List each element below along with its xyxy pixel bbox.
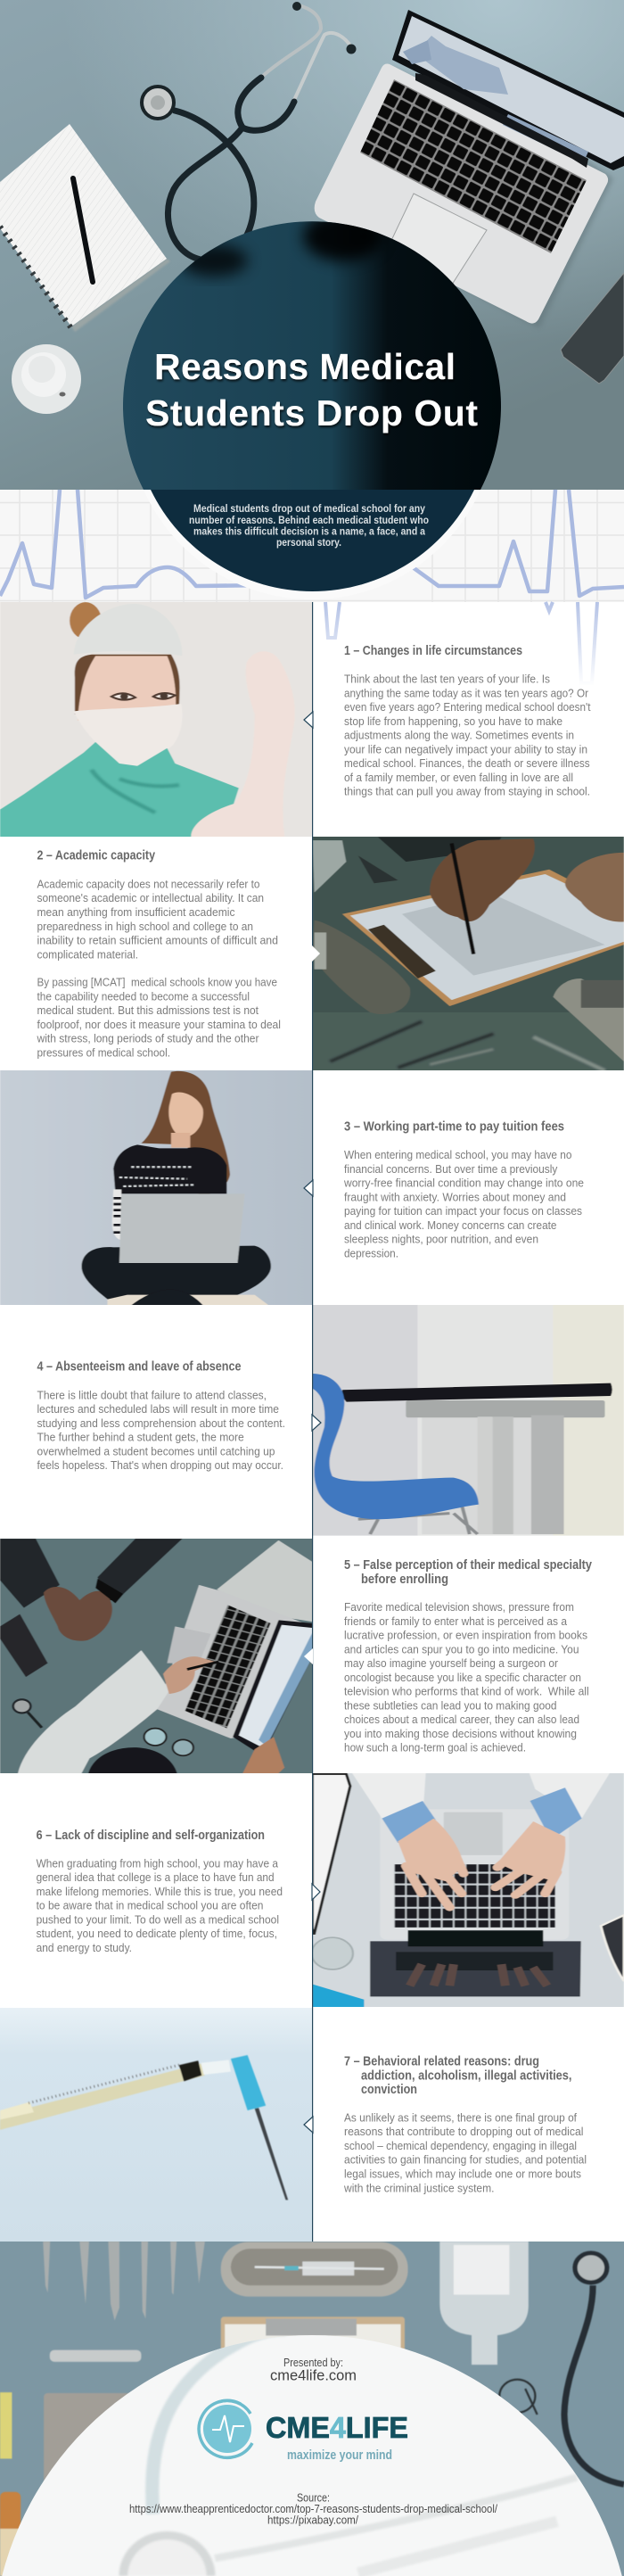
panel 7 text: reasons that contribute to dropping out of medical bbox=[344, 2125, 584, 2138]
title text: Students Drop Out bbox=[145, 392, 478, 433]
panel 6 text: student, you need to dedicate plenty of time, focus, bbox=[37, 1927, 277, 1940]
panel 5 text: choices about a medical career, they can also lead bbox=[344, 1713, 579, 1726]
panel 1 text: adjustments along the way. Sometimes events in bbox=[344, 729, 574, 742]
panel 6 text bbox=[37, 1829, 283, 1954]
footer white circle panel bbox=[2, 2330, 622, 2576]
hero photo: desk with stethoscope, laptop, notebook bbox=[0, 0, 624, 490]
icon: IV bag bbox=[439, 2242, 529, 2365]
panel 2 text: the capability needed to become a successful bbox=[37, 989, 250, 1003]
icon: stethoscope bbox=[142, 2, 357, 260]
presented by text: cme4life.com bbox=[270, 2367, 357, 2383]
panel 4 text: 4 – Absenteeism and leave of absence bbox=[37, 1360, 241, 1375]
panel 3 photo: woman with laptop bbox=[0, 1070, 315, 1305]
panel 2 text: inability to retain sufficient amounts of difficult and bbox=[37, 934, 278, 947]
panel 4 text bbox=[37, 1360, 285, 1472]
panel 6 text: and energy to study. bbox=[37, 1941, 132, 1954]
stethoscope and laptop shadows inside the circle bbox=[180, 211, 383, 277]
icon: pill bottle bbox=[0, 2392, 12, 2458]
panel 4 text: overwhelmed a student becomes until catching up bbox=[37, 1444, 275, 1457]
intro text: number of reasons. Behind each medical student who bbox=[189, 514, 429, 526]
panel 6 text: make lifelong memories. While this is true, you need bbox=[37, 1885, 283, 1898]
panel 1 text: medical school. Finances, the death or severe illness bbox=[344, 756, 590, 770]
panel 1 text: 1 – Changes in life circumstances bbox=[344, 644, 522, 658]
presented by text: Presented by: bbox=[283, 2357, 343, 2369]
panel 2 text: with stress, long periods of study and the other bbox=[37, 1032, 259, 1045]
icon: metal case bbox=[44, 2393, 139, 2504]
icon: notebook with pen bbox=[0, 124, 170, 332]
icon: laptop bbox=[315, 10, 624, 328]
sources text: https://pixabay.com/ bbox=[267, 2514, 358, 2527]
panel 1 text: stop life from happening, so you have to make bbox=[344, 714, 562, 728]
panel 1 text: things that can pull you away from staying in school. bbox=[344, 785, 590, 798]
panel 7 text: activities to gain financing for studies, and potential bbox=[344, 2153, 587, 2167]
panel 5 text: you into making those decisions without knowing bbox=[344, 1727, 577, 1740]
panel 3 text: sleepless nights, poor nutrition, and even bbox=[344, 1233, 538, 1246]
title text: Reasons Medical bbox=[154, 346, 456, 387]
panel 3 text: fraught with anxiety. Worries about money and bbox=[344, 1190, 566, 1203]
presented by text bbox=[270, 2357, 357, 2383]
panel 7 text: conviction bbox=[361, 2083, 417, 2097]
panel 1 text: anything the same today as it was ten years ago? Or bbox=[344, 686, 589, 699]
panel 1 photo: surgeon in mask bbox=[0, 598, 315, 840]
logo tagline: maximize your mind bbox=[287, 2448, 392, 2463]
panel 3 text: depression. bbox=[344, 1246, 398, 1259]
panel 7 text: As unlikely as it seems, there is one final group of bbox=[344, 2110, 577, 2124]
panel 5 text: oncologist because you like a specific character on bbox=[344, 1671, 581, 1684]
panel 2 text: medical student. But this admissions test is not bbox=[37, 1003, 259, 1017]
chart: heartbeat trace bbox=[0, 490, 624, 598]
panel 2 text: 2 – Academic capacity bbox=[37, 849, 155, 863]
panel 6 text: to be aware that in medical school you are often bbox=[37, 1899, 263, 1912]
panel 5 text bbox=[344, 1558, 592, 1754]
panel 4 text: feels hopeless. That's when dropping out may occur. bbox=[37, 1458, 283, 1472]
panel 5 text: lucrative profession, or even inspiration from books bbox=[344, 1629, 587, 1641]
panel 2 photo: hand writing on clipboard bbox=[312, 837, 624, 1074]
panel 7 text bbox=[343, 2055, 587, 2194]
panel 4 text: There is little doubt that failure to attend classes, bbox=[37, 1388, 267, 1401]
panel 6 text: When graduating from high school, you may have a bbox=[37, 1856, 279, 1870]
panel 5 text: Favorite medical television shows, pressure from bbox=[344, 1600, 574, 1614]
panel 7 text: 7 – Behavioral related reasons: drug bbox=[344, 2055, 539, 2069]
panel 5 photo: doctors at laptop from above bbox=[0, 1537, 315, 1774]
icon: clipboard bbox=[221, 2316, 405, 2361]
panel 5 text: and articles can spur you to go into medicine. You bbox=[344, 1642, 579, 1655]
panel 3 text: paying for tuition can impact your focus on classes bbox=[344, 1204, 582, 1218]
intro text: Medical students drop out of medical school for any bbox=[193, 502, 425, 515]
panel 6 text: 6 – Lack of discipline and self-organization bbox=[37, 1829, 265, 1843]
panel 4 text: The further behind a student gets, the more bbox=[37, 1431, 244, 1444]
panel 2 text: By passing [MCAT] medical schools know you have bbox=[37, 976, 277, 989]
intro text: personal story. bbox=[276, 536, 341, 549]
panel 3 text: worry-free financial condition may change into one bbox=[343, 1177, 584, 1190]
panel 6 photo: hands typing on laptop bbox=[312, 1773, 624, 2010]
icon: glasses bbox=[499, 2380, 538, 2415]
panel 1: text side faded heartbeat bbox=[325, 602, 597, 683]
panel 2 text: preparedness in high school and college to an bbox=[37, 920, 253, 933]
panel 7 text: legal issues, which may include one or more bouts bbox=[344, 2167, 581, 2181]
sources text: https://www.theapprenticedoctor.com/top-7-reasons-students-drop-medical-school/ bbox=[129, 2503, 497, 2515]
panel 1 text: of a family member, or even falling in love are all bbox=[344, 771, 573, 784]
panel 1 text: your life can negatively impact your ability to stay in bbox=[344, 742, 587, 755]
panel 2 text: mean anything from insufficient academic bbox=[37, 905, 235, 919]
icon: orange bottle bbox=[0, 2492, 21, 2536]
footer photo: medical instruments on blue table bbox=[0, 2242, 624, 2576]
panel 4 text: lectures and scheduled labs will result in more time bbox=[37, 1402, 279, 1416]
panel 1 text: even five years ago? Entering medical school doesn't bbox=[344, 700, 591, 714]
panel 6 text: pushed to your limit. To do well as a medical school bbox=[37, 1912, 279, 1926]
logo bbox=[199, 2400, 408, 2463]
panel 2 text: pressures of medical school. bbox=[37, 1045, 170, 1060]
icon: surgical instruments bbox=[43, 2242, 205, 2321]
logo wordmark: CME4LIFE bbox=[266, 2411, 408, 2444]
panel 5 text: may also imagine yourself being a surgeon or bbox=[344, 1656, 559, 1670]
panel 7 text: school – chemical dependency, engaging in illegal bbox=[344, 2139, 577, 2152]
intro text: makes this difficult decision is a name, a face, and a bbox=[193, 524, 425, 537]
panel 3 text: financial concerns. But over time a previously bbox=[344, 1162, 558, 1176]
panel 5 text: before enrolling bbox=[361, 1573, 448, 1587]
panel 7 text: with the criminal justice system. bbox=[343, 2181, 494, 2194]
panel 5 text: friends or family to enter what is perceived as a bbox=[344, 1614, 568, 1628]
panel 1 text bbox=[344, 644, 591, 798]
icon: syringe in steel tray bbox=[221, 2242, 408, 2297]
panel 3 text: When entering medical school, you may have no bbox=[344, 1148, 572, 1161]
panel 2 text: complicated material. bbox=[37, 947, 138, 961]
ECG band background bbox=[0, 490, 624, 602]
panel 4 photo: blue chair and desk bbox=[312, 1304, 624, 1536]
icon: thermometer bbox=[50, 2350, 141, 2362]
panel 2 text: Academic capacity does not necessarily refer to bbox=[37, 877, 260, 890]
icon: stethoscope bbox=[564, 2253, 624, 2484]
center divider line with notches bbox=[304, 602, 321, 2242]
icon: smartphone bbox=[561, 273, 624, 384]
panel 4 text: studying and less comprehension about the content. bbox=[37, 1416, 285, 1430]
title text bbox=[145, 346, 478, 433]
panel 6 text: general idea that college is a place to have fun and bbox=[37, 1870, 275, 1884]
panel 5 text: these subtleties can lead you to making good bbox=[344, 1698, 556, 1712]
panel 3 text: and clinical work. Money concerns can create bbox=[344, 1218, 556, 1232]
panel 5 text: 5 – False perception of their medical specialty bbox=[344, 1558, 592, 1573]
panel 5 text: television who performs that kind of work. While all bbox=[344, 1684, 589, 1698]
panel 5 text: how such a long-term goal is achieved. bbox=[344, 1741, 526, 1754]
panel 2 text: someone's academic or intellectual ability. It can bbox=[37, 891, 264, 904]
icon: logo heartbeat ring bbox=[199, 2400, 252, 2457]
panel 7 text: addiction, alcoholism, illegal activities, bbox=[361, 2068, 572, 2083]
panel 7 photo: syringe bbox=[0, 2008, 312, 2242]
title circle bbox=[123, 211, 501, 599]
panel 1 text: Think about the last ten years of your life. Is bbox=[344, 673, 550, 686]
panel 3 text bbox=[343, 1119, 584, 1259]
sources text: Source: bbox=[297, 2492, 330, 2505]
panel 2 text: foolproof, nor does it measure your stamina to deal bbox=[37, 1018, 281, 1031]
intro text bbox=[189, 502, 429, 549]
icon: coffee cup lid bbox=[12, 344, 81, 414]
sources text bbox=[129, 2492, 497, 2527]
panel 3 text: 3 – Working part-time to pay tuition fees bbox=[344, 1119, 564, 1134]
panel 2 text bbox=[37, 849, 281, 1060]
